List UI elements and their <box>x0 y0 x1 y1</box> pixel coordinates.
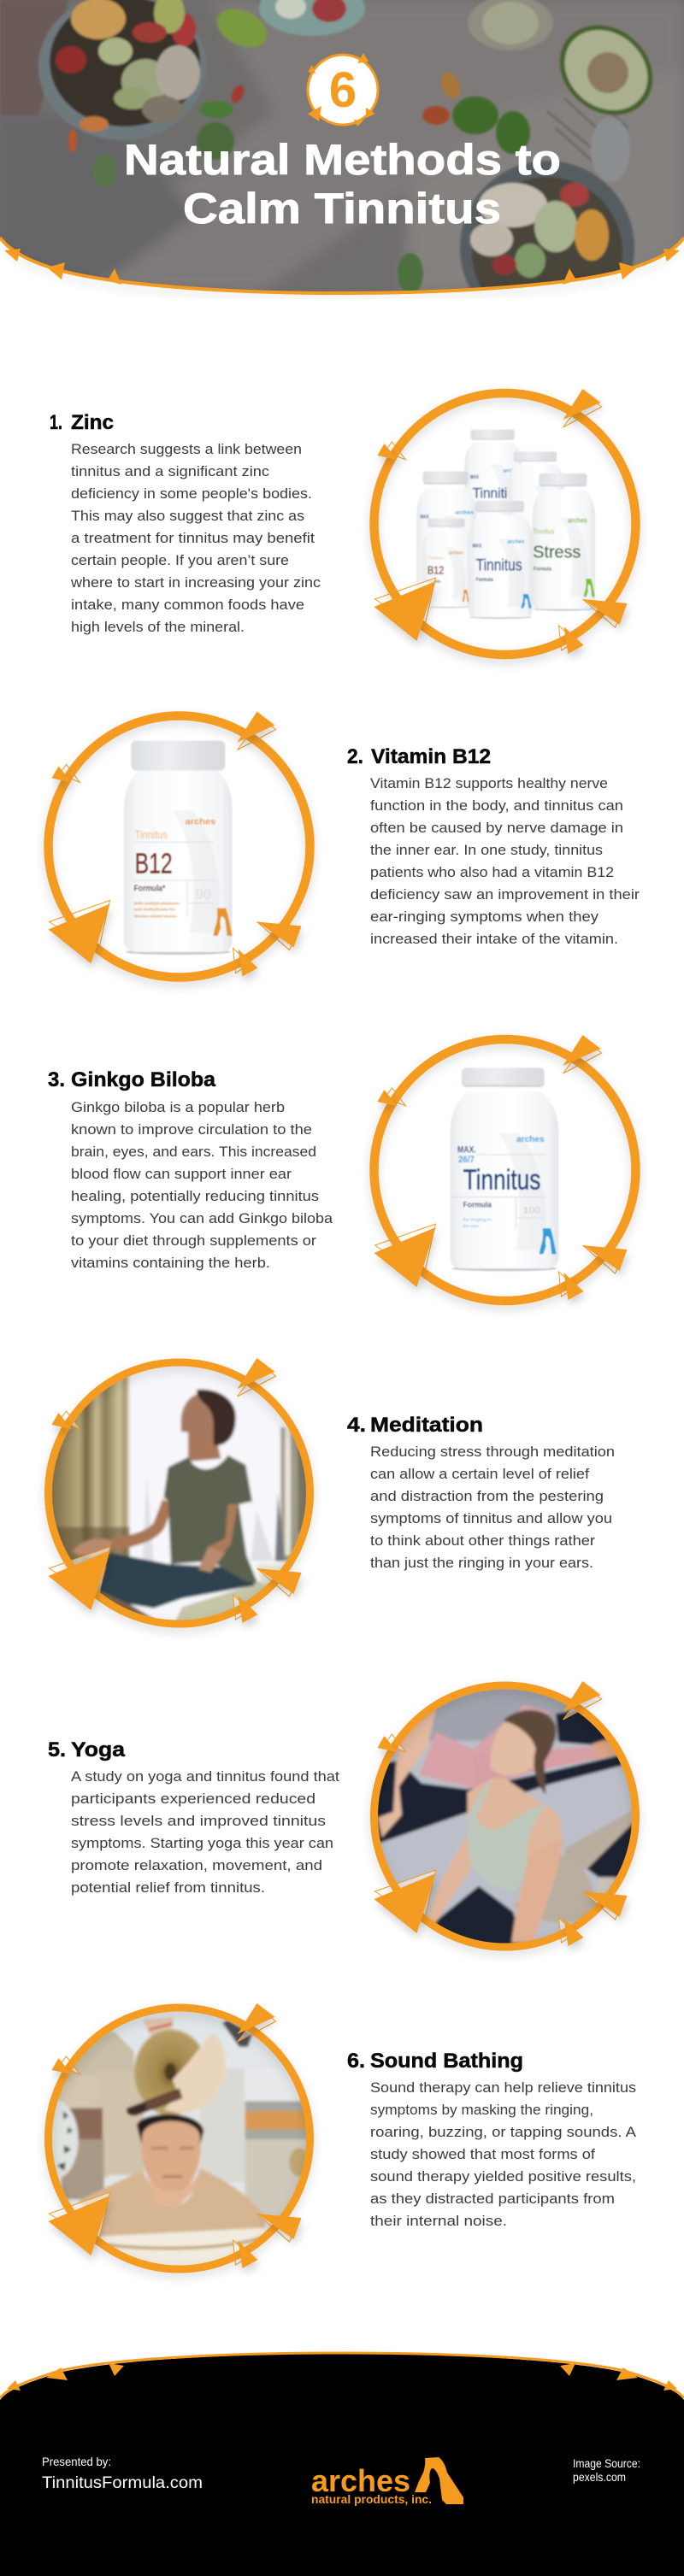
footer arrows <box>7 2363 677 2391</box>
section 6: sound bathing text: Sound therapy can help relieve tinnitus <box>370 2079 636 2096</box>
image: B12 bottle in arrow ring: 90 <box>195 888 211 903</box>
section 3: ginkgo biloba text: brain, eyes, and ears. This increased <box>71 1144 316 1160</box>
section 2: vitamin B12 text: ear-ringing symptoms when they <box>370 909 599 925</box>
section 3: ginkgo biloba text <box>48 1068 333 1271</box>
image: group of supplement bottles in arrow ring: arches <box>507 539 525 545</box>
image: B12 bottle in arrow ring <box>48 711 310 978</box>
section 2: vitamin B12 text: often be caused by nerve damage in <box>370 820 623 836</box>
title <box>124 136 561 232</box>
section 6: sound bathing text: symptoms by masking the ringing, <box>370 2102 593 2118</box>
section 3: ginkgo biloba text: vitamins containing the herb. <box>71 1255 270 1271</box>
section 6: sound bathing text <box>347 2050 637 2229</box>
image: B12 bottle in arrow ring: B12 <box>135 849 173 880</box>
image: group of supplement bottles in arrow ring: MAX <box>470 475 479 480</box>
section 1: zinc text: Zinc <box>71 411 114 434</box>
image: B12 bottle in arrow ring: Formula* <box>134 885 165 894</box>
section 2: vitamin B12 text: patients who also had a vitamin B12 <box>370 864 614 880</box>
image: group of supplement bottles in arrow ring: Stress <box>533 543 581 562</box>
section 1: zinc text: where to start in increasing your zinc <box>70 574 321 591</box>
section 1: zinc text: certain people. If you aren’t sure <box>71 552 289 568</box>
header arrows <box>4 249 680 285</box>
section 4: meditation text: Meditation <box>370 1414 483 1437</box>
footer: arches logo: arches <box>311 2463 410 2498</box>
image: B12 bottle in arrow ring: tinnitus-related issues <box>134 914 177 919</box>
section 3: ginkgo biloba text: symptoms. You can add Ginkgo biloba <box>71 1210 333 1226</box>
image: Tinnitus bottle in arrow ring: 26/7 <box>458 1155 475 1165</box>
section 6: sound bathing text: roaring, buzzing, or tapping sounds. A <box>370 2124 637 2140</box>
footer: presented by: Presented by: <box>42 2455 111 2468</box>
title: Natural Methods to <box>124 136 561 184</box>
image: group of supplement bottles in arrow ring: Tinnitus <box>476 556 522 574</box>
badge: number 6 <box>308 53 378 126</box>
section 4: meditation text: can allow a certain level of relief <box>370 1466 589 1482</box>
section 2: vitamin B12 text: deficiency saw an improvement in their <box>370 886 640 903</box>
section 3: ginkgo biloba text: healing, potentially reducing tinnitus <box>71 1188 319 1204</box>
section 6: sound bathing text: as they distracted participants from <box>370 2191 615 2207</box>
image: group of supplement bottles in arrow ring: arches <box>449 550 463 556</box>
image: group of supplement bottles in arrow ring: MAX <box>421 515 429 520</box>
image: sound bath singing bowl in arrow ring <box>30 2003 316 2271</box>
section 5: yoga text: participants experienced reduced <box>71 1791 315 1807</box>
image: group of supplement bottles in arrow ring: Tinnitus <box>533 526 555 535</box>
section 1: zinc text: Research suggests a link between <box>71 441 302 457</box>
header banner: food photo <box>0 0 684 299</box>
image: B12 bottle in arrow ring: arches <box>186 817 216 826</box>
section 2: vitamin B12 text: Vitamin B12 <box>371 745 491 768</box>
image: B12 bottle in arrow ring: Tinnitus <box>135 829 168 841</box>
section 6: sound bathing text: sound therapy yielded positive results, <box>370 2168 636 2185</box>
section 4: meditation text: and distraction from the pestering <box>370 1488 604 1504</box>
section 3: ginkgo biloba text: to your diet through supplements or <box>71 1232 316 1249</box>
image: Tinnitus bottle in arrow ring <box>374 1035 636 1301</box>
image: Tinnitus bottle in arrow ring: for ringing in <box>463 1217 492 1222</box>
image: woman meditating in arrow ring <box>43 1358 316 1630</box>
section 2: vitamin B12 text: the inner ear. In one study, tinnitus <box>370 842 603 858</box>
section 4: meditation text: symptoms of tinnitus and allow you <box>370 1510 612 1526</box>
image: Tinnitus bottle in arrow ring: Tinnitus <box>463 1165 540 1197</box>
footer: image source: Image Source: <box>573 2456 640 2470</box>
section 6: sound bathing text: Sound Bathing <box>370 2050 523 2073</box>
section 6: sound bathing text: study showed that most forms of <box>370 2146 595 2162</box>
image: group of supplement bottles in arrow ring: arches <box>568 517 587 525</box>
image: Tinnitus bottle in arrow ring: the ears <box>463 1224 479 1229</box>
section 6: sound bathing text: their internal noise. <box>370 2213 507 2229</box>
image: Tinnitus bottle in arrow ring: arches <box>516 1135 545 1144</box>
section 2: vitamin B12 text: increased their intake of the vitamin. <box>370 931 618 947</box>
image: group of supplement bottles in arrow ring: Tinniti <box>473 485 507 502</box>
image: group of supplement bottles in arrow ring: arches <box>503 468 522 474</box>
image: group of supplement bottles in arrow ring: Formula <box>428 579 440 584</box>
image: group of supplement bottles in arrow ring: arches <box>455 510 474 516</box>
section 2: vitamin B12 text: function in the body, and tinnitus can <box>370 797 623 814</box>
image: Tinnitus bottle in arrow ring: MAX. <box>457 1144 476 1155</box>
footer: arches logo <box>311 2457 463 2506</box>
image: woman doing yoga in arrow ring <box>370 1681 644 1951</box>
footer: arches logo: natural products, inc. <box>311 2492 432 2506</box>
section 1: zinc text <box>50 411 321 635</box>
image: B12 bottle in arrow ring: and methylfolate for <box>134 908 175 913</box>
image: Tinnitus bottle in arrow ring: Formula <box>463 1201 492 1209</box>
section 1: zinc text: deficiency in some people's bodies. <box>71 485 312 502</box>
image: group of supplement bottles in arrow ring: Tinnitus <box>428 556 443 560</box>
section 3: ginkgo biloba text: 3. <box>48 1068 65 1091</box>
section 1: zinc text: 1. <box>50 411 62 434</box>
footer: image source: pexels.com <box>573 2470 626 2484</box>
title: Calm Tinnitus <box>183 185 501 232</box>
footer: presented by <box>42 2455 203 2492</box>
section 1: zinc text: intake, many common foods have <box>71 597 304 613</box>
section 3: ginkgo biloba text: known to improve circulation to the <box>71 1121 312 1138</box>
section 6: sound bathing text: 6. <box>347 2050 365 2073</box>
section 1: zinc text: This may also suggest that zinc as <box>71 508 304 524</box>
section 3: ginkgo biloba text: Ginkgo biloba is a popular herb <box>71 1099 285 1115</box>
image: group of supplement bottles in arrow ring: Formula <box>476 578 493 583</box>
section 5: yoga text: stress levels and improved tinnitus <box>71 1813 326 1829</box>
image: Tinnitus bottle in arrow ring: 100 <box>523 1205 540 1215</box>
section 5: yoga text: A study on yoga and tinnitus found that <box>71 1768 339 1785</box>
section 1: zinc text: tinnitus and a significant zinc <box>71 463 270 479</box>
section 2: vitamin B12 text: Vitamin B12 supports healthy nerve <box>370 775 608 791</box>
section 4: meditation text: 4. <box>347 1414 366 1437</box>
image: group of supplement bottles in arrow ring <box>374 389 636 655</box>
badge: number 6: 6 <box>329 62 357 118</box>
section 5: yoga text: promote relaxation, movement, and <box>71 1857 322 1873</box>
footer: image source <box>573 2456 640 2484</box>
image: group of supplement bottles in arrow ring: MAX <box>473 544 482 550</box>
image: B12 bottle in arrow ring: With methylcobalamin <box>134 901 180 906</box>
section 4: meditation text: to think about other things rather <box>370 1532 595 1549</box>
section 3: ginkgo biloba text: blood flow can support inner ear <box>71 1166 292 1182</box>
footer panel <box>0 2353 684 2576</box>
section 1: zinc text: a treatment for tinnitus may benefit <box>71 530 315 546</box>
section 2: vitamin B12 text: 2. <box>347 745 363 768</box>
image: group of supplement bottles in arrow ring: B12 <box>428 565 444 577</box>
section 2: vitamin B12 text <box>347 745 640 947</box>
section 4: meditation text: than just the ringing in your ears. <box>370 1555 593 1571</box>
section 3: ginkgo biloba text: Ginkgo Biloba <box>71 1068 216 1091</box>
section 5: yoga text: potential relief from tinnitus. <box>71 1879 265 1896</box>
section 1: zinc text: high levels of the mineral. <box>71 619 245 635</box>
footer: presented by: TinnitusFormula.com <box>42 2474 203 2492</box>
image: group of supplement bottles in arrow ring: Formula <box>534 566 551 572</box>
section 5: yoga text: 5. <box>48 1738 66 1761</box>
section 5: yoga text <box>48 1738 339 1896</box>
section 5: yoga text: Yoga <box>71 1738 126 1761</box>
section 5: yoga text: symptoms. Starting yoga this year can <box>71 1835 333 1851</box>
section 4: meditation text: Reducing stress through meditation <box>370 1444 615 1460</box>
section 4: meditation text <box>347 1414 615 1571</box>
